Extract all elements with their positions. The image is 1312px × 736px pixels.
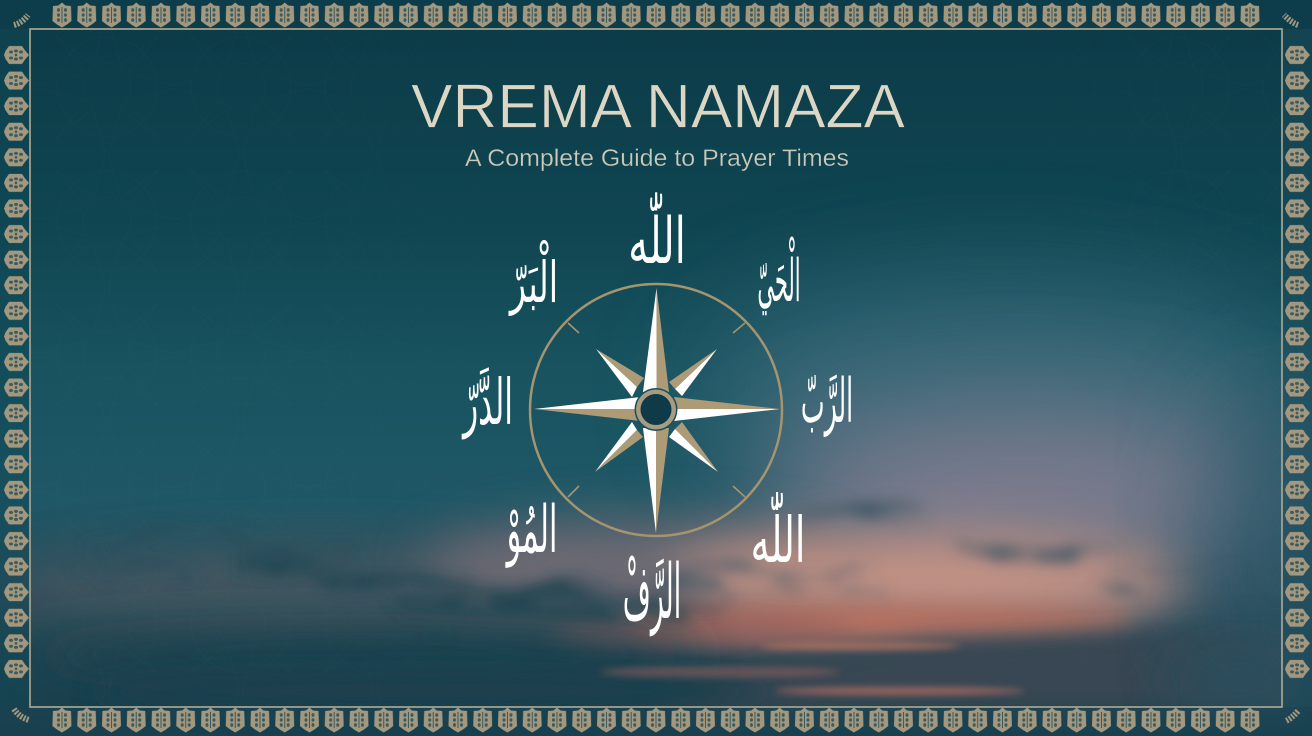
compass hub: [634, 388, 678, 431]
subtitle: A Complete Guide to Prayer Times: [465, 145, 849, 172]
calligraphy ring: [461, 191, 853, 637]
calligraphy: top: اللّٰه: [628, 191, 686, 279]
compass ring: [530, 284, 782, 536]
calligraphy: south-west: المُوْ: [505, 492, 557, 569]
calligraphy: north-west: الْبَرّ: [508, 240, 558, 317]
compass cardinal points: [534, 288, 780, 533]
compass rose: [530, 284, 782, 536]
calligraphy: east: الرَّبّ: [801, 366, 853, 438]
title: VREMA NAMAZA: [411, 72, 906, 142]
compass ticks: [568, 323, 745, 497]
calligraphy: north-east: الْحَيّ: [757, 236, 801, 316]
calligraphy: south-east: اللّٰه: [751, 492, 805, 578]
compass diagonal points: [595, 349, 718, 472]
calligraphy: south: الرَّفْ: [623, 549, 681, 637]
calligraphy: west: الدَّرّ: [461, 366, 513, 439]
